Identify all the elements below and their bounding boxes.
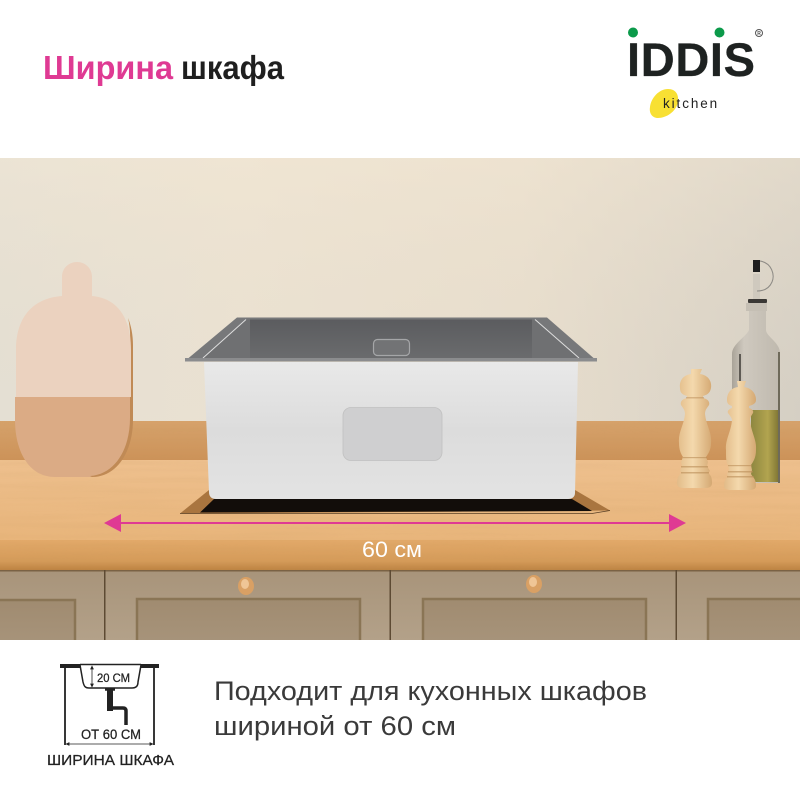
description text bbox=[214, 676, 647, 741]
cabinet sides bbox=[65, 668, 154, 745]
cabinet knobs bbox=[238, 575, 542, 595]
sink rim bbox=[185, 318, 597, 361]
photo: kitchen counter scene bbox=[0, 158, 800, 650]
sink label plate bbox=[343, 408, 442, 460]
sink cutout in the counter bbox=[180, 490, 610, 514]
width measure line bbox=[67, 743, 152, 745]
sink basin interior bbox=[203, 320, 579, 358]
depth arrow bbox=[91, 667, 93, 686]
logo: IDDIS kitchen: kitchen bbox=[663, 96, 719, 111]
diagram caption: ШИРИНА ШКАФА bbox=[47, 752, 174, 769]
drain trap bbox=[105, 690, 126, 725]
title bbox=[43, 49, 285, 86]
sink overflow bbox=[374, 340, 410, 356]
logo: IDDIS kitchen: IDDIS bbox=[627, 33, 755, 86]
wall bbox=[0, 158, 800, 422]
width measure label: ОТ 60 СМ bbox=[81, 727, 141, 742]
backsplash bbox=[0, 421, 800, 461]
countertop front edge bbox=[0, 540, 800, 570]
depth label: 20 СМ bbox=[97, 671, 130, 685]
description text: Подходит для кухонных шкафов bbox=[214, 676, 647, 706]
title: шкафа bbox=[181, 49, 285, 86]
wood grain bbox=[0, 421, 800, 570]
pepper mill small bbox=[724, 381, 756, 490]
pepper mill large bbox=[677, 369, 712, 488]
sink outer body bbox=[204, 362, 578, 499]
sink bbox=[180, 318, 610, 514]
description text: шириной от 60 см bbox=[214, 711, 456, 741]
cabinets bbox=[0, 570, 800, 640]
width label: 60 см bbox=[362, 537, 422, 562]
logo: IDDIS kitchen bbox=[627, 28, 762, 118]
cabinet width diagram bbox=[47, 664, 174, 769]
cutting board bbox=[15, 262, 133, 477]
logo: IDDIS kitchen: R bbox=[757, 31, 761, 37]
countertop bbox=[0, 460, 800, 540]
width arrow bbox=[104, 514, 686, 532]
title: Ширина bbox=[43, 49, 174, 86]
sink section bbox=[60, 664, 159, 688]
olive oil bottle bbox=[732, 260, 780, 483]
